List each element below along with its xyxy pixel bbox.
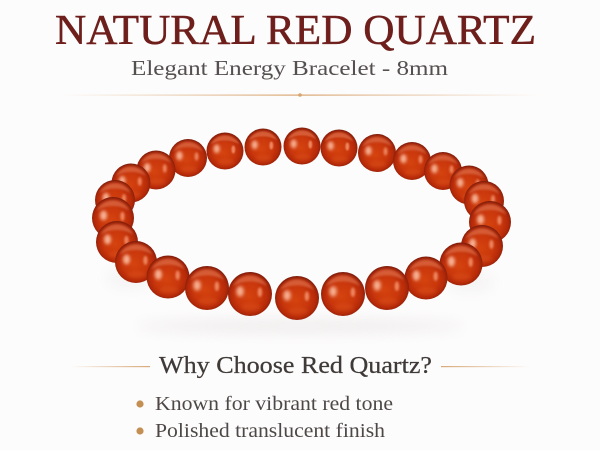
bullet: vibrant red tone: Known for vibrant red tone [155, 394, 393, 415]
bracelet shadow [106, 268, 494, 333]
header divider [60, 93, 540, 97]
bullet: polished finish: Polished translucent finish [155, 421, 385, 442]
subtitle: Elegant Energy Bracelet - 8mm [131, 56, 448, 80]
section heading: Why Choose Red Quartz? [159, 353, 432, 379]
bullet list [136, 394, 393, 442]
title: NATURAL RED QUARTZ [55, 8, 536, 54]
bracelet of red quartz beads [92, 128, 511, 320]
